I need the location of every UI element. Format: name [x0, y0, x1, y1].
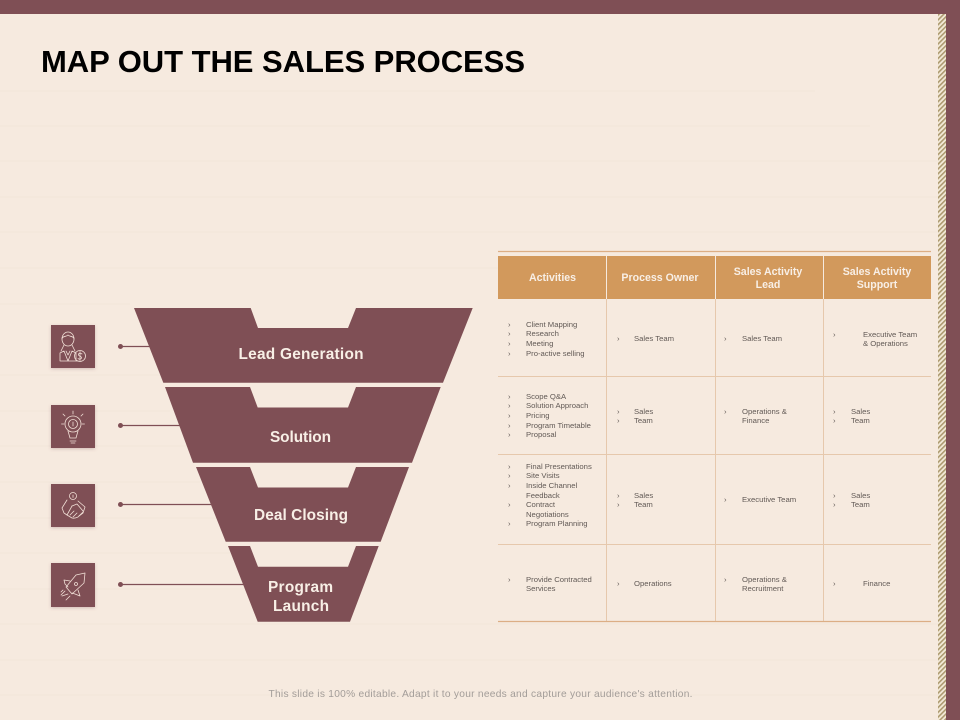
right frame bar: [946, 0, 960, 720]
row 4: Program Launch: Operations &: [742, 575, 787, 584]
row 3: Deal Closing: ›: [617, 491, 620, 500]
row 3: Deal Closing: [508, 462, 870, 528]
right hatched strip: [938, 14, 946, 720]
row 1: Lead Generation: ›: [508, 349, 511, 358]
table header row: [498, 256, 931, 299]
table header row: Lead: [756, 279, 780, 291]
row 4: Program Launch: Services: [526, 584, 556, 593]
title: MAP OUT THE SALES PROCESS: [41, 44, 525, 79]
row 2: Solution: Program Timetable: [526, 421, 591, 430]
row 4: Program Launch: ›: [724, 575, 727, 584]
table: [498, 252, 931, 622]
row 1: Lead Generation: ›: [508, 320, 511, 329]
row 1: Lead Generation: [508, 320, 917, 358]
row 3: Deal Closing: ›: [508, 471, 511, 480]
connector: Solution: [118, 423, 181, 428]
row 2: Solution: Sales: [634, 407, 653, 416]
row 3: Deal Closing: Sales: [634, 491, 653, 500]
row 4: Program Launch: ›: [508, 575, 511, 584]
table header row: Sales Activity: [734, 266, 802, 278]
row 3: Deal Closing: Contract: [526, 500, 556, 509]
row 3: Deal Closing: Feedback: [526, 491, 560, 500]
funnel segment: Solution: Solution: [270, 429, 331, 446]
row 1: Lead Generation: & Operations: [863, 339, 908, 348]
row 4: Program Launch: Operations: [634, 579, 672, 588]
row 1: Lead Generation: ›: [617, 334, 620, 343]
row 1: Lead Generation: Sales Team: [742, 334, 782, 343]
row 3: Deal Closing: Site Visits: [526, 471, 560, 480]
row 2: Solution: ›: [833, 416, 836, 425]
funnel segment: Program Launch: Program: [268, 579, 333, 596]
row 2: Solution: Team: [634, 416, 653, 425]
row 2: Solution: ›: [508, 392, 511, 401]
row 2: Solution: ›: [508, 421, 511, 430]
icon: handshake: [51, 484, 95, 527]
row 2: Solution: Scope Q&A: [526, 392, 567, 401]
row 1: Lead Generation: ›: [724, 334, 727, 343]
row 4: Program Launch: Finance: [863, 579, 890, 588]
row 2: Solution: ›: [833, 407, 836, 416]
connector: Deal Closing: [118, 502, 212, 507]
row 2: Solution: Pricing: [526, 411, 550, 420]
top frame bar: [0, 0, 960, 14]
table header row: Support: [857, 279, 898, 291]
row 2: Solution: [508, 392, 870, 439]
row 2: Solution: Solution Approach: [526, 401, 588, 410]
funnel segment: Program Launch: Launch: [273, 598, 329, 615]
row 1: Lead Generation: ›: [508, 329, 511, 338]
row 2: Solution: ›: [508, 430, 511, 439]
row 2: Solution: ›: [617, 416, 620, 425]
row 4: Program Launch: ›: [833, 579, 836, 588]
row 2: Solution: Sales: [851, 407, 870, 416]
row 2: Solution: Proposal: [526, 430, 557, 439]
row 3: Deal Closing: Sales: [851, 491, 870, 500]
footer note: This slide is 100% editable. Adapt it to your needs and capture your audience's attention.: [268, 689, 692, 700]
row 3: Deal Closing: ›: [508, 519, 511, 528]
funnel segment: Lead Generation: Lead Generation: [238, 346, 364, 363]
row 3: Deal Closing: ›: [833, 500, 836, 509]
icon: light bulb with dollar: [51, 405, 95, 448]
table top rule: [498, 250, 931, 252]
row 3: Deal Closing: ›: [833, 491, 836, 500]
row 3: Deal Closing: Team: [851, 500, 870, 509]
row 1: Lead Generation: Client Mapping: [526, 320, 577, 329]
funnel segment: Program Launch: [228, 546, 379, 622]
row 3: Deal Closing: Executive Team: [742, 495, 796, 504]
row 1: Lead Generation: ›: [508, 339, 511, 348]
row 1: Lead Generation: Research: [526, 329, 559, 338]
row 3: Deal Closing: Team: [634, 500, 653, 509]
row 2: Solution: ›: [508, 411, 511, 420]
row 2: Solution: ›: [617, 407, 620, 416]
row 2: Solution: Team: [851, 416, 870, 425]
row 3: Deal Closing: Program Planning: [526, 519, 588, 528]
row 2: Solution: ›: [724, 407, 727, 416]
row 1: Lead Generation: Executive Team: [863, 330, 917, 339]
table header row: Activities: [529, 272, 576, 284]
row 3: Deal Closing: ›: [508, 462, 511, 471]
table grid: [498, 299, 931, 622]
row 1: Lead Generation: Pro-active selling: [526, 349, 585, 358]
connector: Program Launch: [118, 582, 244, 587]
row 1: Lead Generation: ›: [833, 330, 836, 339]
funnel segment: Solution: [165, 387, 441, 463]
funnel segment: Deal Closing: [196, 467, 409, 542]
row 2: Solution: ›: [508, 401, 511, 410]
row 1: Lead Generation: Sales Team: [634, 334, 674, 343]
table header row: Process Owner: [621, 272, 699, 284]
row 3: Deal Closing: Negotiations: [526, 510, 569, 519]
funnel segment: Deal Closing: Deal Closing: [254, 507, 348, 524]
row 2: Solution: Finance: [742, 416, 769, 425]
row 3: Deal Closing: ›: [508, 500, 511, 509]
row 2: Solution: Operations &: [742, 407, 787, 416]
row 4: Program Launch: ›: [617, 579, 620, 588]
funnel segment: Lead Generation: [134, 308, 473, 383]
row 1: Lead Generation: Meeting: [526, 339, 553, 348]
row 3: Deal Closing: ›: [508, 481, 511, 490]
row 3: Deal Closing: ›: [724, 495, 727, 504]
row 3: Deal Closing: Final Presentations: [526, 462, 592, 471]
icon: businessman with dollar: [51, 325, 95, 368]
row 4: Program Launch: Provide Contracted: [526, 575, 592, 584]
connector: Lead Generation: [118, 344, 150, 349]
row 3: Deal Closing: Inside Channel: [526, 481, 578, 490]
row 3: Deal Closing: ›: [617, 500, 620, 509]
row 4: Program Launch: Recruitment: [742, 584, 784, 593]
funnel: [134, 308, 473, 622]
table header row: Sales Activity: [843, 266, 911, 278]
icon: rocket: [51, 563, 95, 607]
row 4: Program Launch: [508, 575, 890, 593]
